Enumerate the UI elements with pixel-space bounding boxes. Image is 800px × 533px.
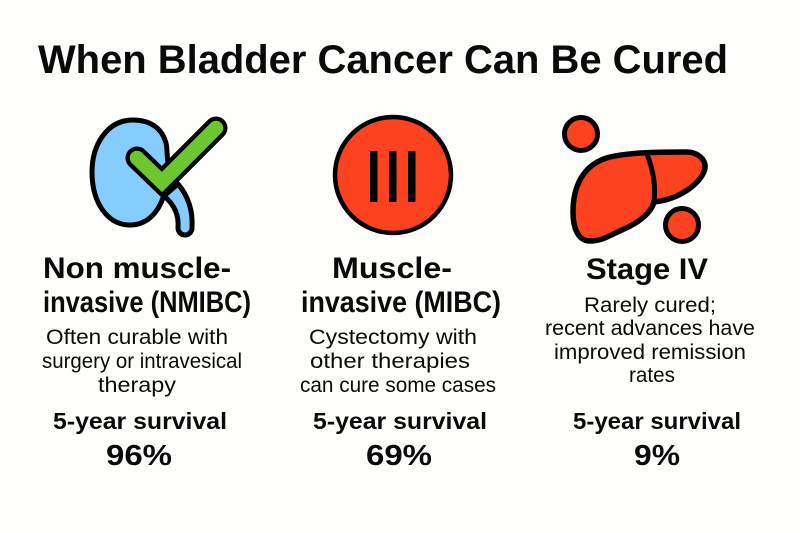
survival label: non muscle-invasive: 5-year survival: [53, 408, 227, 434]
survival value: 96%: 96%: [106, 440, 172, 472]
description: stage IV: Rarely cured;: [584, 293, 716, 317]
survival value: 69%: 69%: [366, 440, 432, 472]
panel: non muscle-invasive: invasive (NMIBC): [43, 286, 251, 319]
icon: liver with metastases: [564, 118, 705, 242]
heading: stage IV: Stage IV: [586, 253, 708, 286]
panel: muscle-invasive: other therapies: [310, 349, 470, 373]
panel: non muscle-invasive: therapy: [98, 373, 176, 397]
heading: non muscle-invasive: Non muscle-: [43, 252, 231, 285]
survival label: stage IV: 5-year survival: [573, 408, 741, 434]
description: muscle-invasive: Cystectomy with: [309, 325, 477, 349]
survival label: muscle-invasive: 5-year survival: [313, 408, 487, 434]
icon: kidney with check mark: [92, 120, 216, 235]
panel: muscle-invasive: can cure some cases: [300, 373, 496, 397]
panel: stage IV: [545, 118, 755, 472]
panel: stage IV: improved remission: [554, 340, 746, 364]
icon: stage III circle: [335, 117, 451, 233]
panel: muscle-invasive: invasive (MIBC): [301, 286, 501, 319]
heading: muscle-invasive: Muscle-: [332, 252, 452, 285]
description: non muscle-invasive: Often curable with: [46, 325, 228, 349]
panel: non muscle-invasive: [42, 120, 251, 472]
panel: stage IV: rates: [629, 363, 675, 387]
panel: stage IV: recent advances have: [545, 316, 755, 340]
survival value: 9%: 9%: [634, 440, 680, 472]
panel: muscle-invasive: [300, 117, 501, 472]
panel: non muscle-invasive: surgery or intravesical: [42, 349, 242, 373]
title: When Bladder Cancer Can Be Cured: [38, 38, 728, 82]
